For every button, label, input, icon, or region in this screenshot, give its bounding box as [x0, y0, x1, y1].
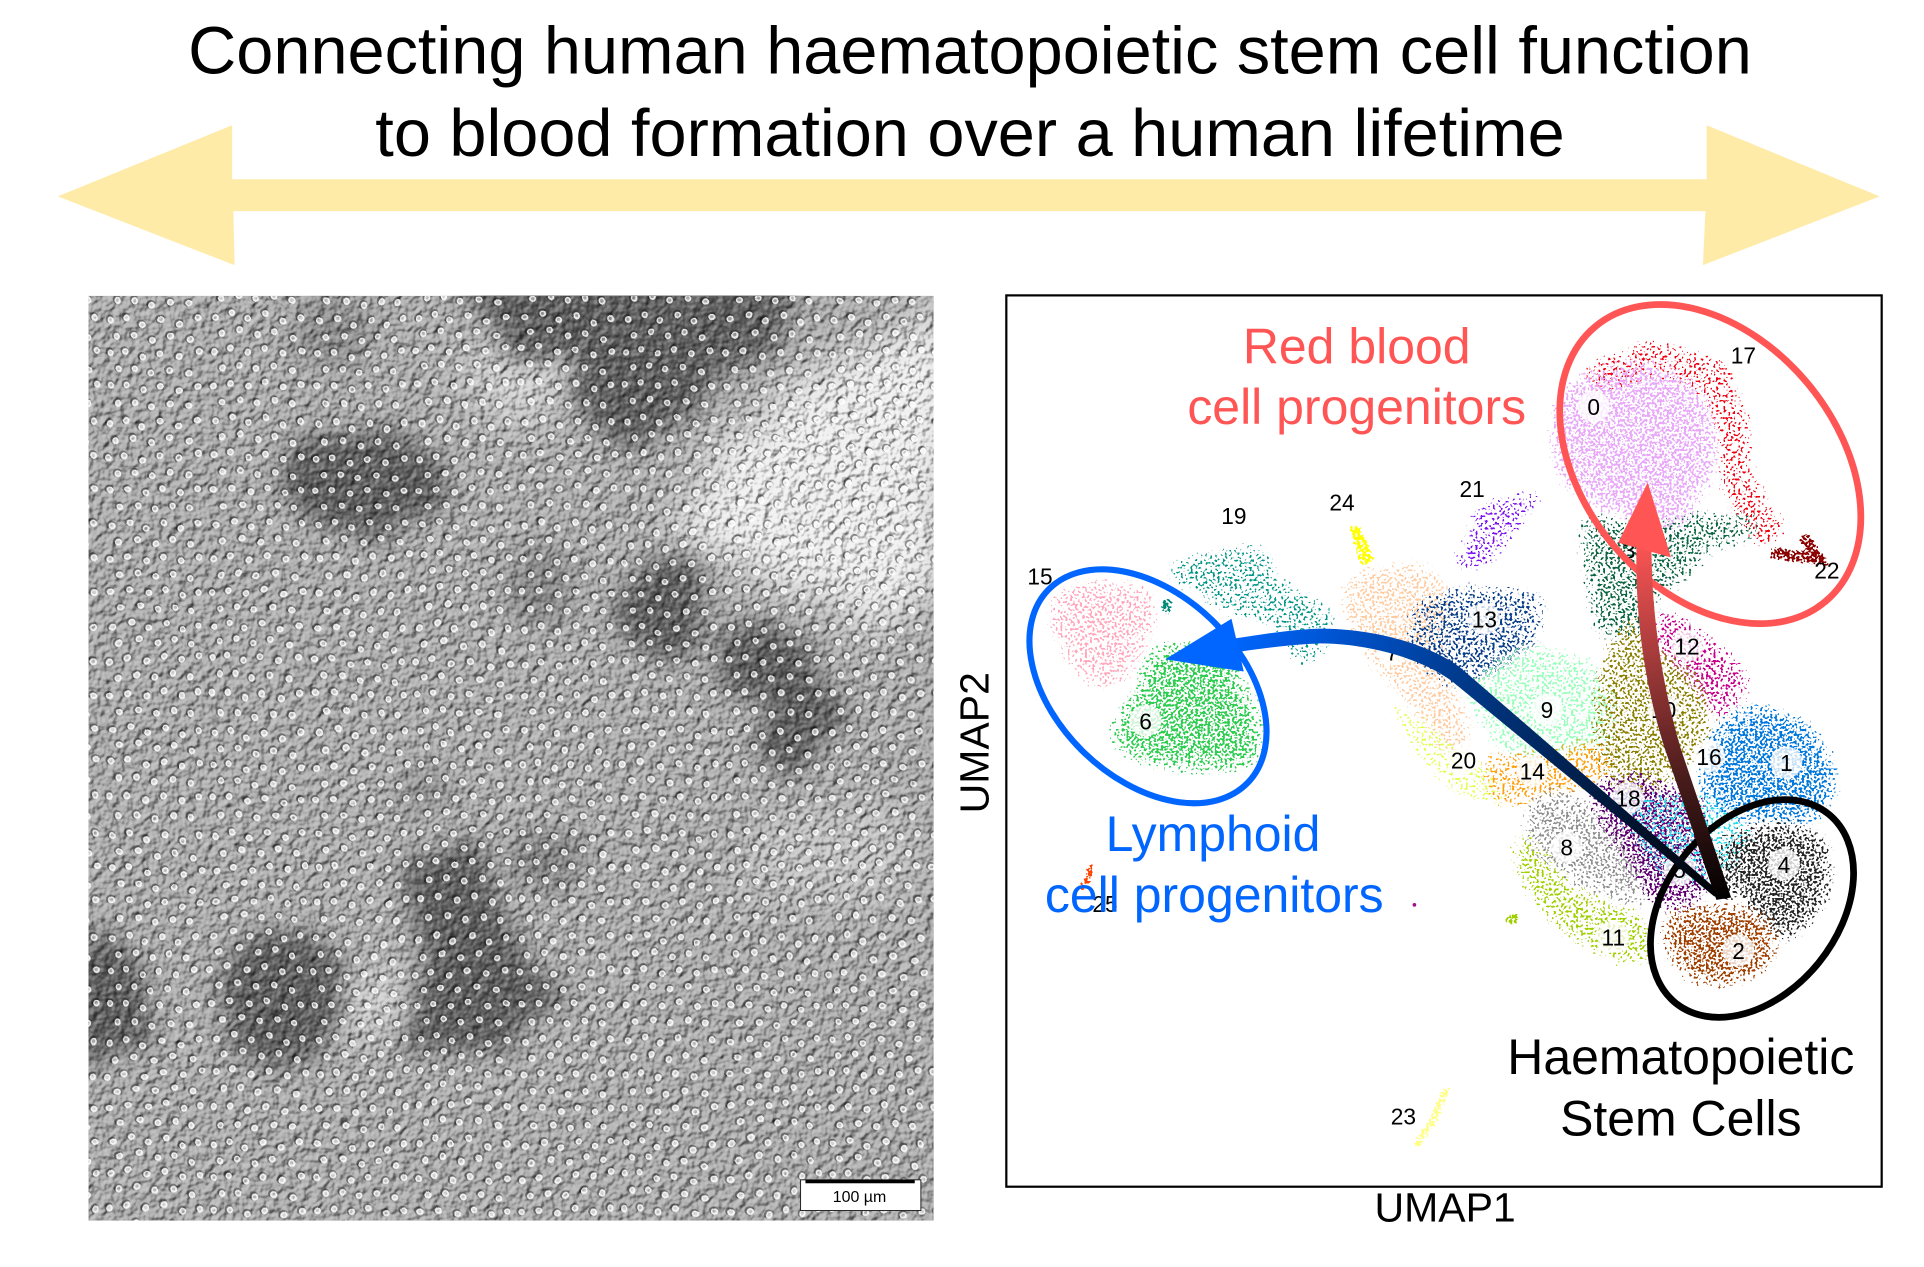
- cluster number labels: 25: [1092, 891, 1118, 917]
- cluster number labels: 22: [1814, 557, 1840, 583]
- cluster number labels: 9: [1541, 697, 1553, 723]
- cluster number labels: 0: [1587, 394, 1600, 420]
- cluster number labels: 2: [1732, 938, 1745, 964]
- scatter: all clusters: [1049, 356, 1836, 1147]
- cluster number labels: 4: [1778, 852, 1790, 878]
- ellipse: red blood cell progenitors: [1498, 245, 1922, 683]
- label: red blood cell progenitors: Red blood: [1243, 318, 1471, 374]
- cluster number labels: 20: [1451, 748, 1476, 774]
- cluster number labels: 16: [1696, 744, 1722, 770]
- cluster number labels: 8: [1560, 835, 1573, 861]
- arrow: stem cells to lymphoid progenitors: [1165, 619, 1729, 900]
- label: lymphoid cell progenitors: cell progenitors: [1045, 867, 1384, 923]
- cluster number labels: 13: [1472, 606, 1497, 632]
- label: red blood cell progenitors: [1187, 318, 1526, 435]
- cluster number labels: 5: [1673, 857, 1686, 883]
- cluster number labels: 15: [1027, 563, 1053, 589]
- cluster number labels: 21: [1459, 476, 1485, 502]
- panel: UMAP scatter plot: [984, 245, 1922, 1187]
- cluster number labels: 6: [1139, 708, 1152, 734]
- label: haematopoietic stem cells: Stem Cells: [1560, 1091, 1802, 1147]
- arrow: double-headed lifetime arrow: [58, 125, 1880, 265]
- panel: microscope photo of cells: [88, 296, 934, 1220]
- cluster number labels: 10: [1651, 697, 1676, 723]
- x axis label: UMAP1: [1374, 1185, 1516, 1231]
- cluster number labels: 17: [1731, 342, 1756, 368]
- label: haematopoietic stem cells: Haematopoietic: [1507, 1029, 1854, 1085]
- cluster number labels: 19: [1221, 503, 1247, 529]
- title: Connecting human haematopoietic stem cell function: [188, 15, 1752, 89]
- cluster number labels: 12: [1674, 633, 1700, 659]
- ellipse: lymphoid progenitors: [984, 524, 1312, 849]
- cluster number labels: 14: [1520, 759, 1545, 785]
- cluster number labels: 18: [1615, 786, 1641, 812]
- cluster number labels: 3: [1623, 538, 1636, 564]
- label: lymphoid cell progenitors: Lymphoid: [1106, 806, 1320, 862]
- cluster number labels: [1027, 342, 1840, 1130]
- title: [188, 15, 1752, 171]
- label: red blood cell progenitors: cell progenitors: [1187, 379, 1526, 435]
- scale bar: [801, 1180, 921, 1211]
- scale bar: 100 µm: [833, 1189, 886, 1206]
- cluster number labels: 1: [1780, 750, 1793, 776]
- label: lymphoid cell progenitors: [1045, 806, 1384, 923]
- cluster number labels: 24: [1329, 490, 1355, 516]
- arrow: stem cells to red blood cell progenitors: [1618, 482, 1731, 900]
- title: to blood formation over a human lifetime: [375, 97, 1565, 171]
- ellipse: haematopoietic stem cells: [1609, 760, 1895, 1057]
- cluster number labels: 7: [1386, 640, 1399, 666]
- cluster number labels: 23: [1391, 1104, 1416, 1130]
- cluster number labels: 11: [1602, 924, 1625, 950]
- label: haematopoietic stem cells: [1507, 1029, 1854, 1147]
- y axis label: UMAP2: [951, 672, 997, 813]
